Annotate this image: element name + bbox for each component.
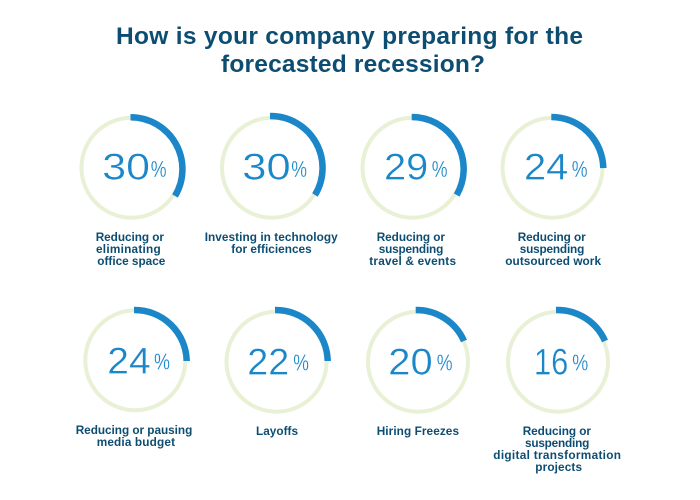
label (205, 230, 338, 256)
label: eliminating (96, 242, 161, 256)
label: digital transformation (493, 448, 621, 462)
label: travel & events (369, 254, 456, 268)
value: % (572, 350, 588, 376)
progress arc (134, 310, 187, 361)
label: office space (97, 254, 166, 268)
value (247, 342, 309, 382)
progress arc (130, 117, 182, 196)
value: 24 (524, 146, 568, 187)
progress arc (275, 310, 328, 361)
panel: reducing or suspending travel and events, 29% (362, 117, 464, 268)
value: 22 (247, 342, 289, 382)
panel: reducing or suspending outsourced work, 24% (502, 117, 603, 268)
panel: reducing or suspending digital transformation projects, 16% (493, 310, 621, 474)
ring track (222, 118, 322, 218)
label (96, 230, 166, 268)
value: 16 (534, 342, 568, 382)
ring track (502, 118, 602, 218)
value (524, 146, 588, 187)
panel: hiring freezes, 20% (368, 310, 468, 438)
label: Reducing or (518, 230, 586, 244)
panel: reducing or eliminating office space, 30% (82, 117, 182, 268)
label (493, 424, 621, 474)
value (384, 146, 448, 187)
progress arc (416, 310, 464, 341)
progress arc (412, 117, 464, 195)
value (388, 342, 452, 382)
value: % (437, 350, 452, 376)
value: 30 (242, 146, 291, 187)
value: % (432, 156, 448, 182)
value: % (151, 156, 166, 182)
ring track (508, 312, 608, 412)
label: Hiring Freezes (377, 424, 459, 438)
title: How is your company preparing for the (116, 23, 583, 50)
value: 24 (107, 340, 151, 382)
panel: reducing or pausing media budget, 24% (76, 310, 192, 449)
progress arc (270, 116, 323, 195)
label (505, 230, 601, 268)
value (242, 146, 307, 187)
value (102, 146, 166, 187)
label: Reducing or (377, 230, 445, 244)
progress arc (551, 117, 603, 168)
value: 30 (102, 146, 150, 187)
title: forecasted recession? (221, 51, 485, 78)
progress arc (556, 310, 605, 341)
value: % (154, 348, 170, 374)
label: Layoffs (256, 424, 298, 438)
label: for efficiences (231, 242, 312, 256)
label: Reducing or (96, 230, 164, 244)
panel: investing in technology for efficiences, 30% (205, 116, 338, 256)
ring track (85, 310, 185, 410)
label: suspending (379, 242, 443, 256)
label: Reducing or (523, 424, 591, 438)
value: % (293, 350, 309, 376)
value: % (572, 156, 588, 182)
label: suspending (520, 242, 584, 256)
title (116, 23, 583, 78)
ring track (82, 118, 182, 218)
label: projects (535, 460, 582, 474)
value: 20 (388, 342, 433, 382)
label: outsourced work (505, 254, 601, 268)
ring track (226, 312, 326, 412)
ring track (362, 118, 462, 218)
label (369, 230, 456, 268)
label (76, 423, 192, 449)
ring track (368, 312, 468, 412)
value: 29 (384, 146, 428, 187)
value (107, 340, 170, 382)
label: media budget (97, 435, 175, 449)
value: % (291, 156, 307, 182)
label: Reducing or pausing (76, 423, 192, 437)
panel: layoffs, 22% (226, 310, 328, 438)
label: suspending (525, 436, 589, 450)
label: Investing in technology (205, 230, 338, 244)
